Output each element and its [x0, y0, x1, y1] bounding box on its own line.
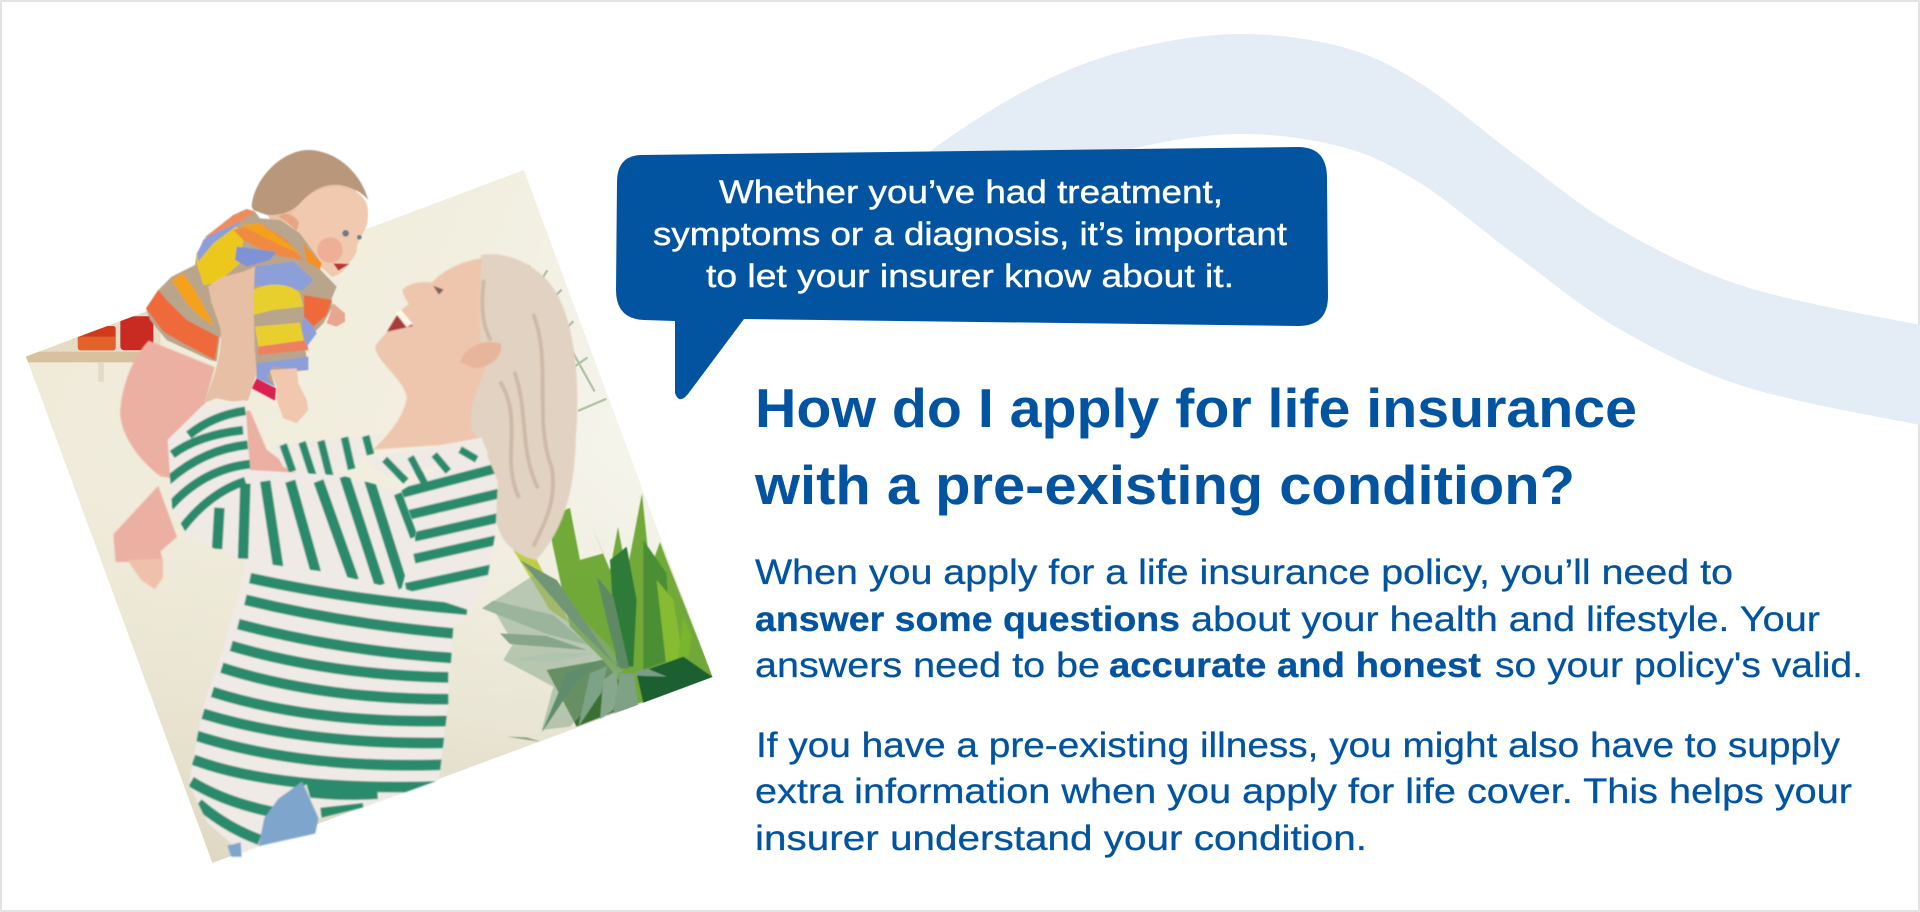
- back blades: [547, 493, 713, 727]
- frond mass: [490, 573, 623, 730]
- body paragraph 2: extra information when you apply for life cover. This helps your: [755, 772, 1852, 811]
- teeth: [395, 310, 412, 327]
- baby trousers: [113, 341, 309, 562]
- yellow blades: [513, 550, 570, 623]
- baby hair: [252, 150, 368, 215]
- woman face and neck: [373, 258, 486, 450]
- baby hand right: [327, 303, 345, 327]
- neckline: [363, 437, 488, 476]
- body paragraph 1: so your policy's valid.: [1495, 646, 1863, 685]
- grey-green fronds: [482, 560, 667, 742]
- eye: [433, 286, 444, 294]
- baby arm and fist: [270, 368, 308, 423]
- mouth: [387, 311, 413, 332]
- bubble shape: [616, 147, 1328, 399]
- bubble text: [653, 174, 1287, 294]
- woman, baby trousers and far sleeve: [113, 254, 577, 857]
- houseplant: [482, 493, 713, 742]
- chest shirt: [401, 442, 500, 610]
- baby sweater: [146, 209, 337, 387]
- body paragraph 2: If you have a pre-existing illness, you might also have to supply: [756, 726, 1841, 765]
- trouser strap: [252, 378, 276, 401]
- near sleeve: [168, 400, 416, 590]
- body paragraph 1: answer some questions: [755, 600, 1180, 639]
- hair shadows: [482, 280, 553, 547]
- bubble text: symptoms or a diagnosis, it’s important: [653, 216, 1287, 252]
- heading: How do I apply for life insurance: [755, 377, 1637, 439]
- heading: with a pre-existing condition?: [754, 454, 1575, 516]
- baby face: [287, 187, 368, 277]
- baby head base: [263, 153, 357, 240]
- body paragraph 1: accurate and honest: [1109, 646, 1481, 685]
- woman hair: [468, 254, 577, 560]
- speech bubble: [616, 147, 1328, 399]
- baby foot: [127, 559, 163, 589]
- collar stripes: [385, 450, 477, 484]
- body paragraph 1: [755, 553, 1863, 685]
- baby ear: [278, 214, 299, 231]
- far sleeve stripes: [271, 434, 385, 481]
- cheek: [317, 237, 343, 263]
- heading: [754, 377, 1637, 516]
- photo: mother lifting baby: [24, 150, 713, 863]
- jeans: [227, 782, 319, 857]
- baby upper body: [146, 150, 368, 423]
- body paragraph 2: insurer understand your condition.: [755, 819, 1367, 858]
- torso shirt: [189, 551, 486, 853]
- baby eyes and mouth: [333, 230, 362, 271]
- ear: [460, 342, 501, 368]
- body paragraph 1: When you apply for a life insurance policy, you’ll need to: [755, 553, 1733, 592]
- woman raised hand: [203, 267, 257, 403]
- decorative wave swoosh: [900, 34, 1920, 425]
- bubble text: Whether you’ve had treatment,: [719, 174, 1223, 210]
- body paragraph 1: answers need to be: [755, 646, 1100, 685]
- photo background wall: [24, 170, 713, 863]
- body paragraph 2: [755, 726, 1852, 858]
- body paragraph 1: about your health and lifestyle. Your: [1191, 600, 1820, 639]
- bubble text: to let your insurer know about it.: [706, 258, 1234, 294]
